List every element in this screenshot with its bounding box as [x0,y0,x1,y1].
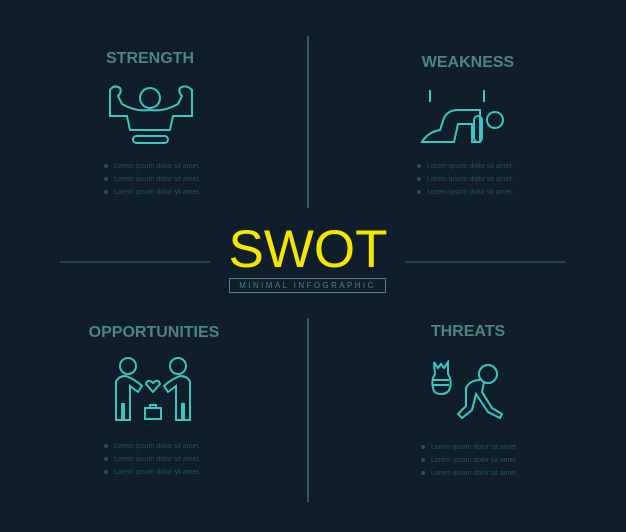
heading: strength: STRENGTH [106,50,194,67]
icon: bomb and running man [431,360,504,420]
icon: tired person [420,90,504,143]
icon: strong man [109,85,193,144]
bullets: opportunities [104,442,200,476]
bullets: strength: Lorem ipsum dolor sit amet. [114,176,200,183]
subtitle box [229,278,386,293]
bullets: strength: Lorem ipsum dolor sit amet. [114,189,200,196]
heading: opportunities: OPPORTUNITIES [89,324,219,341]
bullets: opportunities: Lorem ipsum dolor sit amet. [114,469,200,476]
bullets: weakness: Lorem ipsum dolor sit amet. [427,176,513,183]
bullets: weakness: Lorem ipsum dolor sit amet. [427,163,513,170]
bullets: threats: Lorem ipsum dolor sit amet. [431,444,517,451]
bullets: opportunities: Lorem ipsum dolor sit amet. [114,443,200,450]
heading: threats: THREATS [431,323,505,340]
subtitle box: MINIMAL INFOGRAPHIC [239,281,376,290]
bullets: threats: Lorem ipsum dolor sit amet. [431,470,517,477]
bullets: strength [104,162,200,196]
bullets: strength: Lorem ipsum dolor sit amet. [114,163,200,170]
bullets: threats [421,444,517,477]
bullets: opportunities: Lorem ipsum dolor sit amet. [114,456,200,463]
bullets: weakness [417,162,513,196]
bullets: threats: Lorem ipsum dolor sit amet. [431,457,517,464]
title: SWOT: SWOT [228,220,387,279]
heading: weakness: WEAKNESS [422,54,514,71]
bullets: weakness: Lorem ipsum dolor sit amet. [427,189,513,196]
icon: two people with heart [115,357,191,421]
